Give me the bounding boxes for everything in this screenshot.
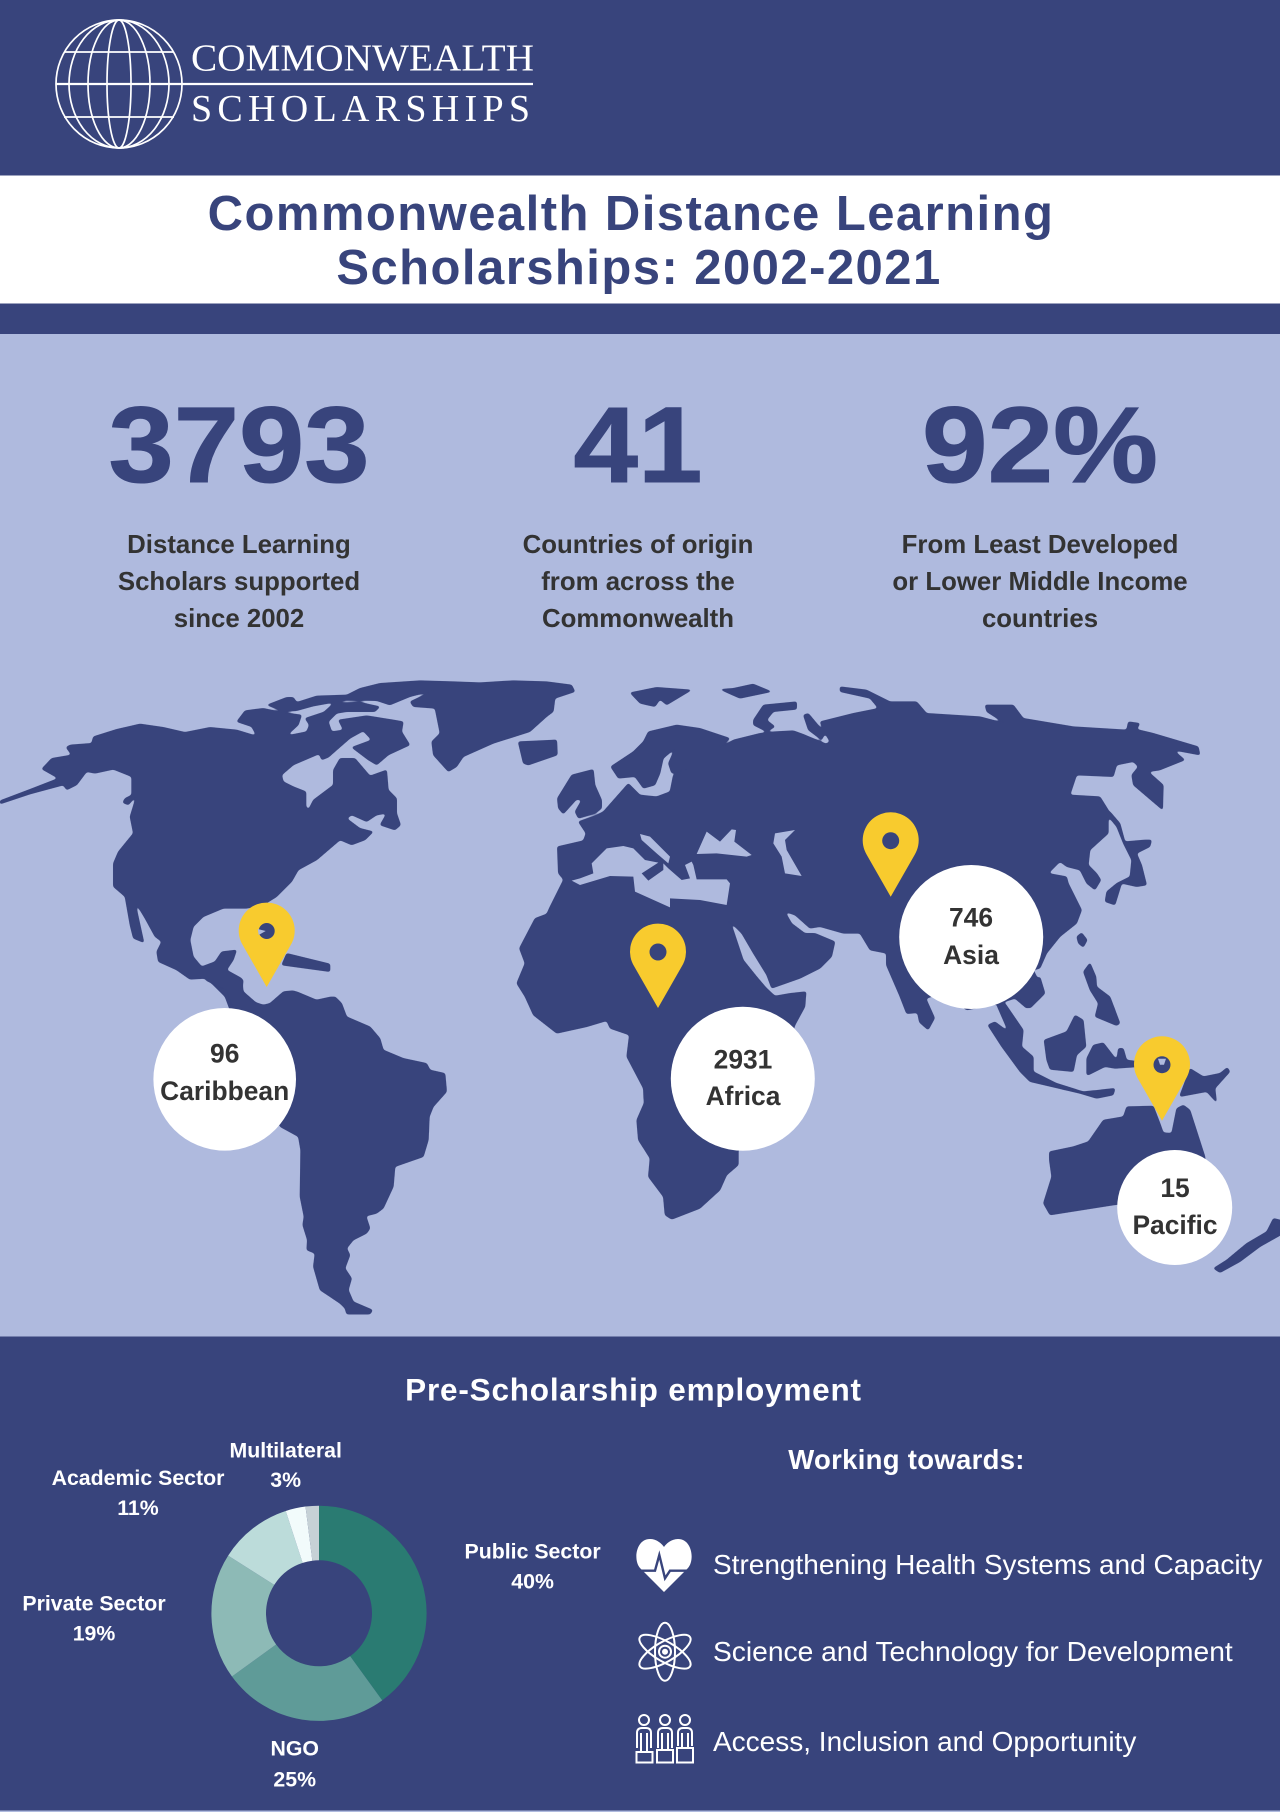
footer edge (0, 1810, 1280, 1812)
logo: Commonwealth Scholarships (56, 20, 534, 148)
callout: Pacific 15: 15 (1160, 1173, 1190, 1203)
label: Academic Sector 11%: Academic Sector (52, 1466, 224, 1490)
label: Academic Sector 11%: 11% (117, 1496, 159, 1520)
light map panel (0, 334, 1280, 1336)
donut chart: employment sectors (211, 1506, 427, 1721)
title band (0, 176, 1280, 304)
stat: 92% low income: From Least Developed (902, 531, 1178, 559)
stat: 41 countries: from across the (541, 568, 735, 596)
icon: three people on pedestals (636, 1715, 693, 1762)
stat: 41 countries: Countries of origin (523, 531, 753, 559)
stat: 92% low income: 92% (922, 384, 1158, 505)
India (887, 945, 960, 1029)
map pin: Asia (863, 812, 919, 897)
stat: 3793 scholars: Scholars supported (118, 568, 360, 596)
title (208, 187, 1054, 295)
stat: 3793 scholars: Distance Learning (127, 531, 351, 559)
icon: atom (635, 1623, 695, 1681)
stat: 3793 scholars (108, 384, 370, 633)
stat: 3793 scholars: 3793 (108, 384, 370, 505)
label: NGO 25%: NGO (270, 1737, 319, 1761)
Europe and Asia (518, 684, 1200, 1010)
label: Private Sector 19% (22, 1592, 166, 1646)
label: Private Sector 19%: Private Sector (22, 1592, 166, 1616)
logo: Commonwealth Scholarships: COMMONWEALTH (191, 38, 534, 80)
Indonesia, Australia and New Zealand (988, 963, 1280, 1273)
title: Scholarships: 2002-2021 (336, 241, 942, 295)
callout: Asia 746: Asia (943, 940, 999, 970)
Africa (517, 880, 806, 1219)
text: science and technology: Science and Technology for Development (713, 1635, 1233, 1667)
callout: Africa 2931: Africa (706, 1081, 781, 1111)
icon: heart with pulse (636, 1539, 692, 1592)
logo: Commonwealth Scholarships: SCHOLARSHIPS (191, 88, 530, 130)
callout: Pacific 15: Pacific (1132, 1210, 1218, 1240)
stat: 3793 scholars: since 2002 (174, 605, 304, 633)
label: Public Sector 40%: Public Sector (465, 1539, 601, 1563)
stat: 41 countries: Commonwealth (542, 605, 734, 633)
stat: 92% low income (892, 384, 1188, 633)
Japan, Taiwan and Philippines (1077, 808, 1152, 947)
text: access and inclusion: Access, Inclusion and Opportunity (713, 1726, 1136, 1757)
map pin: Africa (630, 924, 686, 1008)
callout: Africa 2931 (671, 1007, 815, 1151)
label: Public Sector 40%: 40% (511, 1569, 554, 1593)
label: Multilateral 3%: Multilateral (229, 1438, 342, 1462)
callout: Asia 746 (899, 865, 1043, 1009)
callout: Caribbean 96 (153, 1008, 296, 1151)
callout: Caribbean 96: 96 (210, 1039, 239, 1069)
stat: 92% low income: or Lower Middle Income (892, 568, 1188, 596)
label: Multilateral 3% (229, 1438, 342, 1492)
callout: Caribbean 96: Caribbean (160, 1076, 289, 1106)
Greenland and Arctic islands (267, 681, 575, 772)
title: Commonwealth Distance Learning (208, 187, 1054, 241)
stat: 41 countries: 41 (574, 384, 702, 505)
heading: pre-scholarship employment: Pre-Scholarship employment (405, 1372, 862, 1408)
label: NGO 25% (270, 1737, 319, 1792)
label: Public Sector 40% (465, 1539, 601, 1593)
world map (0, 681, 1280, 1314)
map pin: Pacific (1134, 1036, 1190, 1121)
label: Academic Sector 11% (52, 1466, 224, 1520)
label: Private Sector 19%: 19% (73, 1622, 115, 1646)
heading: working towards: Working towards: (788, 1444, 1025, 1475)
callout: Pacific 15 (1117, 1150, 1232, 1265)
text: health systems: Strengthening Health Systems and Capacity (713, 1549, 1262, 1580)
stat: 41 countries (523, 384, 753, 633)
callout: Asia 746: 746 (949, 903, 993, 933)
inland seas (572, 829, 802, 907)
map pin: Caribbean (239, 903, 295, 987)
North America (0, 708, 410, 1010)
South America (205, 980, 447, 1314)
callout: Africa 2931: 2931 (714, 1044, 772, 1074)
stat: 92% low income: countries (982, 605, 1098, 633)
label: Multilateral 3%: 3% (270, 1468, 301, 1492)
label: NGO 25%: 25% (273, 1768, 316, 1792)
